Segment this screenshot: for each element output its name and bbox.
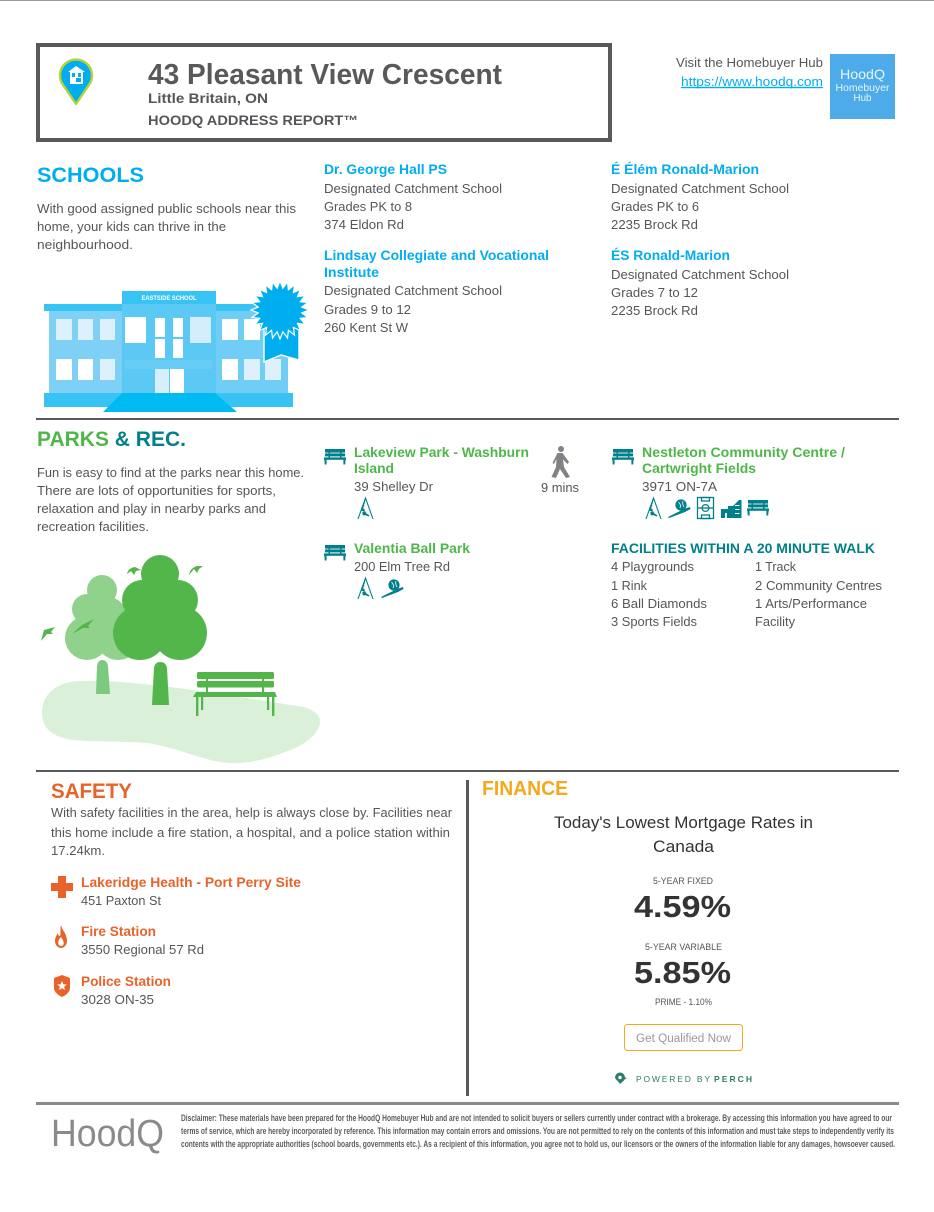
school: É Élém Ronald-Marion: Designated Catchment School [611,181,789,196]
schools intro text [37,201,296,252]
park: Valentia Ball Park: 200 Elm Tree Rd [354,559,450,574]
school: ÉS Ronald-Marion [611,247,789,318]
panel: safety [51,779,453,1007]
school: Dr. George Hall PS [324,161,502,232]
school: Dr. George Hall PS: 374 Eldon Rd [324,217,404,232]
city: Little Britain, ON [148,91,268,106]
facilities within walk: 4 Playgrounds [611,559,694,574]
mortgage rates title [554,813,813,856]
icon: bench [612,449,634,464]
walk time [541,446,579,495]
park: Lakeview Park: Lakeview Park - Washburn [354,444,529,460]
safety: police station: Police Station [81,973,171,989]
school: Lindsay Collegiate: 260 Kent St W [324,320,409,335]
rate: 5-year variable: 5-YEAR VARIABLE [645,942,722,952]
facilities within walk: 1 Track [755,559,796,574]
panel: finance [482,777,813,1084]
facilities within walk: 1 Rink [611,578,647,593]
school: Lindsay Collegiate: Grades 9 to 12 [324,302,411,317]
heading: finance: FINANCE [482,777,568,800]
school illustration: EASTSIDE SCHOOL [142,296,197,302]
disclaimer [181,1113,895,1150]
park: Valentia Ball Park: Valentia Ball Park [354,540,470,556]
header panel [38,45,610,140]
facilities within walk: 3 Sports Fields [611,614,697,629]
rate: 5-year variable: 5.85% [634,955,731,990]
icon: ball and bat [381,579,404,598]
school: Dr. George Hall PS: Grades PK to 8 [324,199,412,214]
homebuyer hub link: Visit the Homebuyer Hub [676,55,823,70]
icon: sports field [698,498,714,518]
footer logo: HoodQ: HoodQ [51,1113,164,1155]
park: Nestleton Community Centre: 3971 ON-7A [642,479,717,494]
safety: hospital: 451 Paxton St [81,893,161,908]
school: Dr. George Hall PS: Dr. George Hall PS [324,161,447,177]
icon: bench [324,449,346,464]
heading: safety: SAFETY [51,779,132,803]
facilities within walk: 6 Ball Diamonds [611,596,708,611]
safety intro text: 17.24km. [51,843,105,858]
button: get qualified now: Get Qualified Now [636,1033,732,1045]
facilities within walk: 2 Community Centres [755,578,882,593]
icon: swing [358,498,373,519]
schools intro text: home, your kids can thrive in the [37,219,226,234]
parks intro text: recreation facilities. [37,519,149,534]
powered by perch: PERCH [714,1074,752,1084]
icon: bench [324,545,346,560]
parks intro text [37,465,304,534]
park: Nestleton Community Centre [612,444,845,519]
park bench [193,672,277,716]
parks intro text: relaxation and play in nearby parks and [37,501,266,516]
walk time: 9 mins [541,480,579,495]
icon: swing [646,498,661,519]
school: ÉS Ronald-Marion: Grades 7 to 12 [611,285,698,300]
icon: walking person [552,446,570,478]
rate: 5-year fixed: 4.59% [634,889,731,924]
safety: police station: 3028 ON-35 [81,992,154,1007]
school illustration [44,281,309,412]
facilities within walk [611,541,882,629]
safety: fire station: Fire Station [81,923,156,939]
school: É Élém Ronald-Marion [611,161,789,232]
homebuyer hub badge: HoodQ [840,66,885,82]
rate: 5-year variable: PRIME - 1.10% [655,997,712,1007]
school: Lindsay Collegiate: Designated Catchment School [324,283,502,298]
park: Valentia Ball Park [324,540,470,599]
school: Lindsay Collegiate: Lindsay Collegiate and Vocational [324,247,549,263]
schools intro text: neighbourhood. [37,237,133,252]
icon: community building [721,500,742,518]
school: ÉS Ronald-Marion: 2235 Brock Rd [611,303,698,318]
icon: location pin with house [60,60,92,104]
school: ÉS Ronald-Marion: ÉS Ronald-Marion [611,247,730,263]
rate: 5-year fixed [634,876,731,924]
facilities within walk: Facility [755,614,795,629]
button: get qualified now [624,1024,742,1050]
safety: fire station: 3550 Regional 57 Rd [81,942,204,957]
school: Dr. George Hall PS: Designated Catchment School [324,181,502,196]
report label: HOODQ ADDRESS REPORT™ [148,113,358,128]
rate: 5-year variable [634,942,731,1007]
parks intro text: Fun is easy to find at the parks near this home. [37,465,304,480]
icon: shield [54,975,70,997]
safety: hospital [51,874,301,908]
park: Lakeview Park [324,444,529,519]
icon: flame [55,925,67,948]
mortgage rates title: Canada [653,837,715,856]
homebuyer hub badge: Hub [854,92,872,104]
icon: perch pin [615,1072,627,1084]
park: Nestleton Community Centre: Nestleton Community Centre / [642,444,845,460]
address title: 43 Pleasant View Crescent [148,59,502,91]
park: Lakeview Park: 39 Shelley Dr [354,479,434,494]
park: Nestleton Community Centre: Cartwright Fields [642,460,756,476]
header frame [38,45,610,140]
school: É Élém Ronald-Marion: Grades PK to 6 [611,199,699,214]
schools intro text: With good assigned public schools near this [37,201,296,216]
icon: swing [358,578,373,599]
facilities within walk: FACILITIES WITHIN A 20 MINUTE WALK [611,541,875,556]
park illustration [41,555,320,763]
icon: ball and bat [668,499,690,518]
school: Lindsay Collegiate [324,247,549,335]
safety intro text: With safety facilities in the area, help is always close by. Facilities near [51,805,453,820]
school: ÉS Ronald-Marion: Designated Catchment School [611,267,789,282]
safety: hospital: Lakeridge Health - Port Perry Site [81,874,301,890]
school: É Élém Ronald-Marion: 2235 Brock Rd [611,217,698,232]
top edge line [0,0,934,1]
facilities within walk: 1 Arts/Performance [755,596,867,611]
parks intro text: There are lots of opportunities for sports, [37,483,276,498]
safety intro text [51,805,453,858]
panel: schools [37,161,789,412]
icon: bench [747,500,769,516]
icon: award ribbon [251,281,309,362]
rate: 5-year fixed: 5-YEAR FIXED [653,876,713,886]
powered by perch [615,1072,752,1084]
homebuyer hub badge: Homebuyer [836,82,890,94]
homebuyer hub link: https://www.hoodq.com [681,74,823,89]
powered by perch: POWERED BY [636,1074,710,1084]
panel: parks and recreation [37,427,882,763]
park: Lakeview Park: Island [354,460,394,476]
heading: parks and rec: PARKS & REC. [37,427,186,451]
birds [41,566,203,641]
safety intro text: this home include a fire station, a hospital, and a police station within [51,825,450,840]
safety: police station [54,973,171,1007]
school: Lindsay Collegiate: Institute [324,264,379,280]
homebuyer hub link [676,55,823,89]
safety: fire station [55,923,204,957]
school: É Élém Ronald-Marion: É Élém Ronald-Marion [611,161,759,177]
icon: medical cross [51,876,73,898]
homebuyer hub badge [830,54,895,119]
heading: schools: SCHOOLS [37,163,144,187]
mortgage rates title: Today's Lowest Mortgage Rates in [554,813,813,832]
